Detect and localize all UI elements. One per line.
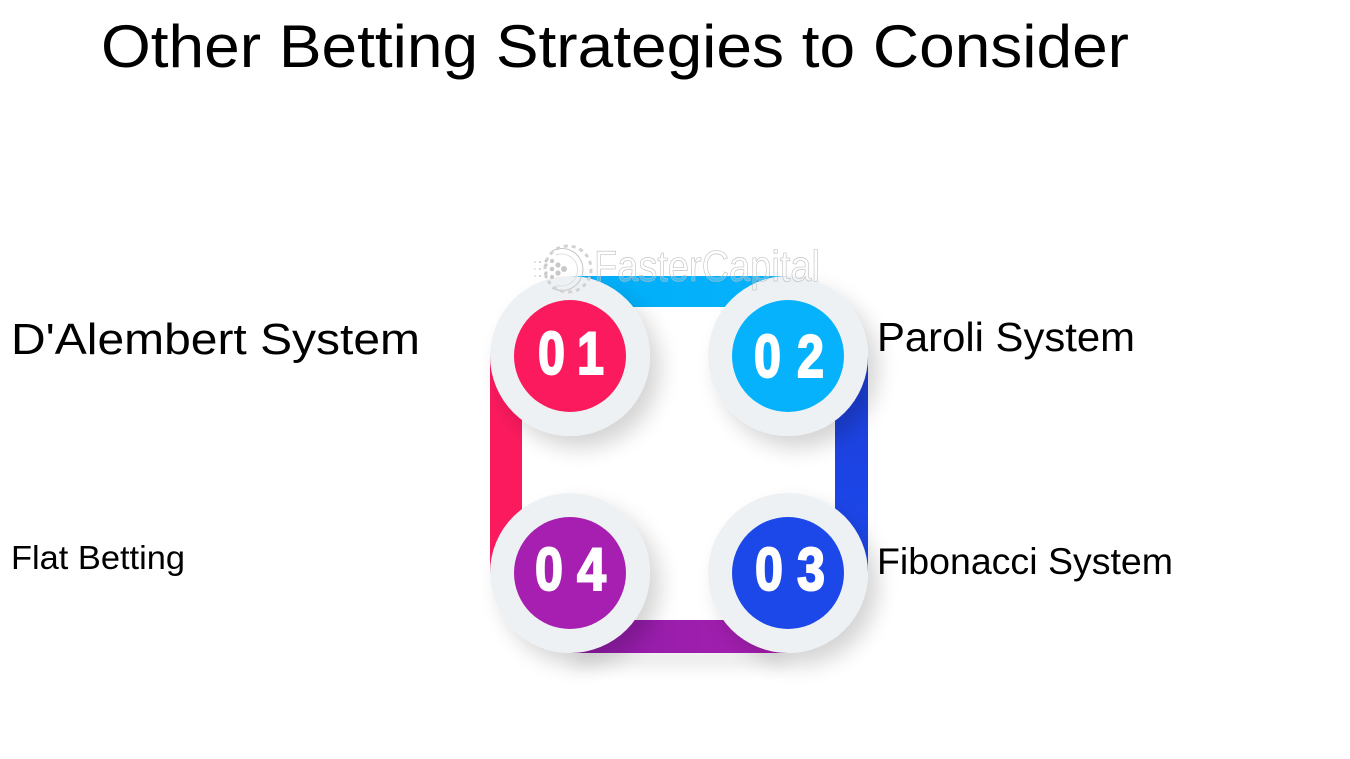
connector: top bar	[570, 276, 788, 307]
step 01 badge: 0	[538, 320, 565, 387]
step 01 badge: 1	[577, 320, 604, 387]
label: Flat Betting: Flat Betting	[11, 539, 185, 576]
step 02 badge	[708, 276, 868, 436]
connector: bottom bar	[570, 620, 788, 653]
step 04 badge: 0	[535, 536, 563, 603]
connector: right bar	[835, 356, 868, 573]
connector: left bar	[490, 356, 522, 573]
loop diagram	[490, 276, 868, 664]
title: Other Betting Strategies to Consider	[101, 13, 1129, 80]
step 02 badge: 2	[797, 323, 824, 390]
step 03 badge: 0	[755, 536, 783, 603]
step 04 badge: 4	[577, 536, 607, 603]
step 02 badge: 0	[754, 323, 781, 390]
step 03 badge	[708, 493, 868, 653]
label: Paroli System: Paroli System	[877, 314, 1135, 360]
icon: gear	[534, 246, 591, 292]
label: Fibonacci System: Fibonacci System	[877, 541, 1173, 582]
step 04 badge	[490, 493, 650, 653]
step 03 badge: 3	[797, 536, 825, 603]
watermark: FasterCapital: FasterCapital	[594, 242, 820, 291]
label: D'Alembert System: D'Alembert System	[11, 315, 420, 364]
watermark: FasterCapital	[534, 242, 820, 292]
step 01 badge	[490, 276, 650, 436]
